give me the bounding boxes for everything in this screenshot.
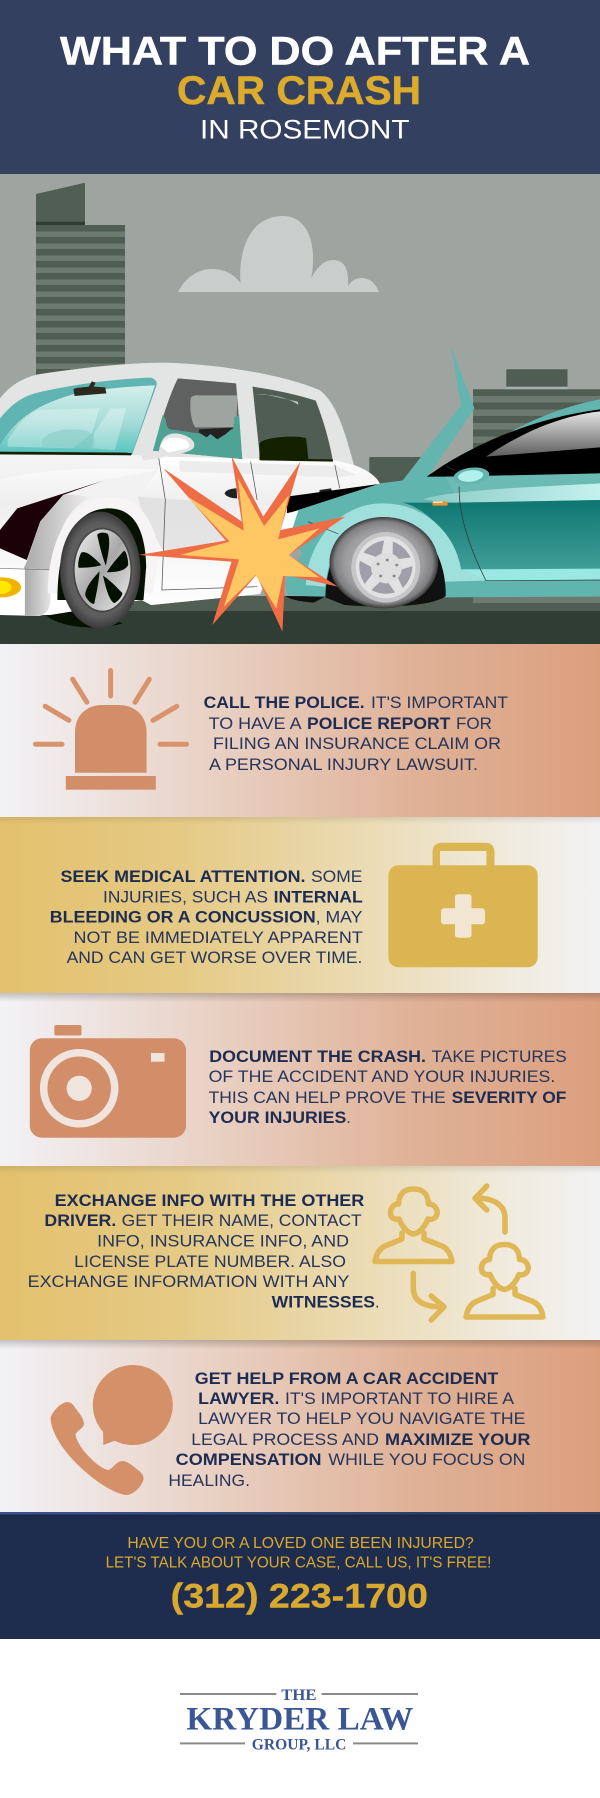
right building (369, 369, 600, 604)
text: exchange info: . (375, 1294, 380, 1312)
panel: exchange info (0, 1166, 600, 1340)
text: call the police: IT'S IMPORTANT (371, 694, 508, 712)
text: get help from a lawyer: COMPENSATION (176, 1451, 322, 1469)
text: exchange info: INFO, INSURANCE INFO, AND (97, 1232, 349, 1250)
icon: police siren (36, 670, 186, 790)
road (0, 596, 600, 644)
text: document the crash: . (346, 1109, 351, 1127)
text: document the crash: TAKE PICTURES (432, 1048, 567, 1066)
text: document the crash (209, 1048, 567, 1127)
logo: the kryder law group: THE (281, 1687, 316, 1704)
text: call the police: TO HAVE A (209, 715, 302, 733)
teal car (285, 346, 600, 608)
panel: call the police (0, 644, 600, 817)
text: get help from a lawyer: GET HELP FROM A CAR ACCIDENT (195, 1370, 498, 1388)
text: call the police: A PERSONAL INJURY LAWSUIT. (209, 756, 478, 774)
cloud (178, 216, 379, 292)
text: call the police: FOR (456, 715, 492, 733)
text: exchange info (28, 1192, 380, 1312)
text: get help from a lawyer: HEALING. (168, 1472, 250, 1490)
text: get help from a lawyer: MAXIMIZE YOUR (385, 1431, 530, 1449)
text: document the crash: THIS CAN HELP PROVE THE (209, 1089, 446, 1107)
text: seek medical attention: BLEEDING OR A CONCUSSION (50, 908, 316, 926)
left skyscraper (36, 183, 125, 380)
text: get help from a lawyer: LEGAL PROCESS AND (191, 1431, 379, 1449)
header panel (0, 0, 600, 174)
text: call the police (204, 694, 508, 774)
text: call the police: CALL THE POLICE. (204, 694, 365, 712)
text: exchange info: EXCHANGE INFORMATION WITH ANY (28, 1273, 349, 1291)
text: get help from a lawyer: LAWYER TO HELP YOU NAVIGATE THE (198, 1410, 525, 1428)
text: get help from a lawyer: LAWYER. (198, 1390, 279, 1408)
icon: two people exchanging info (375, 1186, 543, 1320)
white car (0, 363, 380, 628)
text: get help from a lawyer: IT'S IMPORTANT TO HIRE A (285, 1390, 514, 1408)
collision starburst (139, 456, 346, 632)
panel: get help from a lawyer (0, 1340, 600, 1512)
logo: the kryder law group (180, 1687, 418, 1753)
icon: camera (30, 1025, 186, 1138)
text: call the police: FILING AN INSURANCE CLAIM OR (213, 735, 501, 753)
icon: phone and speech bubble (50, 1365, 173, 1495)
text: exchange info: EXCHANGE INFO WITH THE OTHER (55, 1192, 364, 1210)
text: get help from a lawyer: WHILE YOU FOCUS ON (328, 1451, 525, 1469)
text: call the police: POLICE REPORT (307, 715, 450, 733)
text: seek medical attention: INJURIES, SUCH AS (103, 888, 268, 906)
text: seek medical attention: SEEK MEDICAL ATTENTION. (60, 868, 306, 886)
hero illustration: car crash scene (0, 174, 600, 644)
call to action text (106, 1535, 491, 1571)
logo: the kryder law group: KRYDER LAW (186, 1701, 413, 1737)
text: seek medical attention: SOME (311, 868, 362, 886)
text: get help from a lawyer (168, 1370, 530, 1490)
call to action panel (0, 1512, 600, 1639)
logo: the kryder law group: GROUP, LLC (252, 1736, 346, 1753)
call to action text: LET'S TALK ABOUT YOUR CASE, CALL US, IT'S FREE! (106, 1554, 491, 1571)
text: seek medical attention (50, 868, 363, 967)
text: document the crash: DOCUMENT THE CRASH. (209, 1048, 426, 1066)
panel: document the crash (0, 993, 600, 1166)
text: exchange info: DRIVER. (44, 1212, 116, 1230)
text: seek medical attention: , MAY (316, 908, 362, 926)
title line: what to do after a: WHAT TO DO AFTER A (60, 30, 530, 74)
icon: first aid kit (388, 843, 538, 967)
text: document the crash: YOUR INJURIES (209, 1109, 346, 1127)
text: seek medical attention: AND CAN GET WORSE OVER TIME. (67, 949, 362, 967)
text: exchange info: GET THEIR NAME, CONTACT (122, 1212, 362, 1230)
call to action text: HAVE YOU OR A LOVED ONE BEEN INJURED? (127, 1535, 474, 1552)
title line: car crash: CAR CRASH (177, 69, 421, 113)
text: seek medical attention: NOT BE IMMEDIATELY APPARENT (74, 929, 363, 947)
subtitle: in rosemont: IN ROSEMONT (200, 114, 410, 144)
text: seek medical attention: INTERNAL (274, 888, 363, 906)
text: document the crash: OF THE ACCIDENT AND YOUR INJURIES. (209, 1068, 555, 1086)
panel: seek medical attention (0, 817, 600, 993)
phone number: (312) 223-1700 (171, 1577, 428, 1615)
text: document the crash: SEVERITY OF (452, 1089, 566, 1107)
text: exchange info: WITNESSES (272, 1294, 375, 1312)
text: exchange info: LICENSE PLATE NUMBER. ALSO (74, 1253, 346, 1271)
